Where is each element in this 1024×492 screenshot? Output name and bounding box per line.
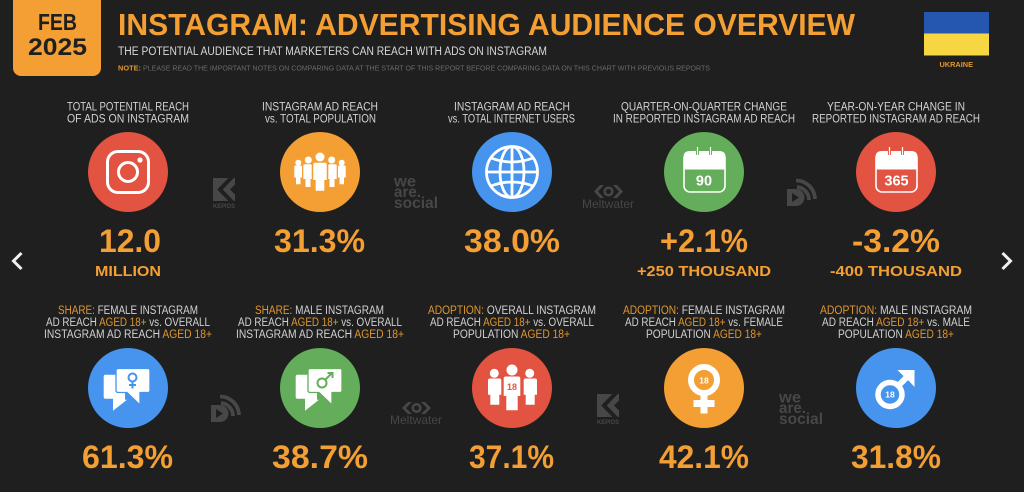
logo: we are social: are. bbox=[779, 400, 806, 417]
panel: quarter-on-quarter change: +250 THOUSAND bbox=[637, 263, 771, 280]
panel: male share: AD REACH AGED 18+ vs. OVERALL bbox=[238, 317, 403, 329]
icon: instagram bbox=[88, 132, 168, 212]
panel: male share: SHARE: MALE INSTAGRAM bbox=[255, 305, 384, 317]
panel: reach vs population bbox=[262, 102, 378, 259]
panel: overall adoption: POPULATION AGED 18+ bbox=[453, 329, 570, 341]
logo: DataReportal bbox=[211, 396, 239, 422]
panel: total potential reach bbox=[67, 102, 189, 280]
icon: male symbol 18: 18 bbox=[885, 390, 895, 400]
logo: Meltwater: Meltwater bbox=[582, 197, 634, 211]
icon: male symbol 18 bbox=[856, 348, 936, 428]
icon: calendar 90 bbox=[664, 132, 744, 212]
logo: we are social: are. bbox=[394, 184, 421, 201]
flag: Ukraine: UKRAINE bbox=[940, 60, 973, 69]
panel: year-on-year change: -3.2% bbox=[852, 223, 940, 259]
panel: total potential reach: TOTAL POTENTIAL REACH bbox=[67, 102, 189, 114]
panel: reach vs internet users bbox=[448, 102, 575, 259]
logo: we are social: we bbox=[778, 390, 801, 406]
panel: male adoption bbox=[820, 305, 972, 475]
panel: year-on-year change: -400 THOUSAND bbox=[830, 263, 962, 280]
logo: Meltwater: Meltwater bbox=[390, 413, 442, 427]
panel: year-on-year change: REPORTED INSTAGRAM AD REACH bbox=[812, 114, 980, 126]
panel: overall adoption: AD REACH AGED 18+ vs. OVERALL bbox=[430, 317, 595, 329]
logo: Kepios: KEPIOS bbox=[213, 203, 236, 210]
logo: Kepios bbox=[597, 392, 620, 426]
panel: female share: AD REACH AGED 18+ vs. OVERALL bbox=[46, 317, 211, 329]
panel: female share: INSTAGRAM AD REACH AGED 18+ bbox=[44, 329, 212, 341]
panel: female adoption: AD REACH AGED 18+ vs. FEMALE bbox=[625, 317, 783, 329]
arrow: previous bbox=[14, 253, 22, 269]
logo: we are social: social bbox=[779, 411, 823, 428]
panel: female adoption: POPULATION AGED 18+ bbox=[646, 329, 762, 341]
icon: globe bbox=[472, 132, 552, 212]
panel: reach vs internet users: 38.0% bbox=[464, 223, 560, 259]
panel: female share bbox=[44, 305, 212, 475]
logo: we are social bbox=[393, 174, 438, 212]
icon: female symbol 18: 18 bbox=[699, 376, 709, 386]
panel: male share: 38.7% bbox=[272, 439, 368, 475]
panel: reach vs population: INSTAGRAM AD REACH bbox=[262, 102, 378, 114]
panel: male adoption: POPULATION AGED 18+ bbox=[838, 329, 954, 341]
arrow: next bbox=[1002, 253, 1010, 269]
panel: overall adoption bbox=[428, 305, 596, 475]
panel: male share bbox=[236, 305, 404, 475]
panel: female adoption: 42.1% bbox=[659, 439, 749, 475]
panel: year-on-year change bbox=[812, 102, 980, 280]
panel: quarter-on-quarter change: +2.1% bbox=[660, 223, 748, 259]
panel: total potential reach: MILLION bbox=[95, 263, 161, 280]
panel: reach vs population: 31.3% bbox=[274, 223, 365, 259]
date badge: FEB bbox=[38, 9, 77, 35]
logo: we are social: social bbox=[394, 195, 438, 212]
panel: total potential reach: 12.0 bbox=[99, 223, 161, 259]
icon: calendar 365 bbox=[856, 132, 936, 212]
logo: Meltwater bbox=[582, 185, 634, 211]
icon: adults 18 plus: 18 bbox=[507, 382, 517, 392]
subtitle: THE POTENTIAL AUDIENCE THAT MARKETERS CAN REACH WITH ADS ON INSTAGRAM bbox=[118, 46, 547, 58]
panel: male adoption: AD REACH AGED 18+ vs. MALE bbox=[822, 317, 970, 329]
panel: total potential reach: OF ADS ON INSTAGRAM bbox=[67, 114, 189, 126]
logo: we are social bbox=[778, 390, 823, 428]
panel: year-on-year change: YEAR-ON-YEAR CHANGE IN bbox=[827, 102, 965, 114]
logo: Meltwater bbox=[390, 402, 442, 427]
logo: Kepios bbox=[213, 176, 236, 210]
panel: female share: 61.3% bbox=[82, 439, 173, 475]
icon: female symbol 18 bbox=[664, 348, 744, 428]
icon: male speech bubbles bbox=[280, 348, 360, 428]
panel: quarter-on-quarter change bbox=[613, 102, 795, 280]
panel: reach vs population: vs. TOTAL POPULATION bbox=[265, 114, 376, 126]
panel: female share: SHARE: FEMALE INSTAGRAM bbox=[58, 305, 198, 317]
panel: quarter-on-quarter change: IN REPORTED INSTAGRAM AD REACH bbox=[613, 114, 795, 126]
date badge: 2025 bbox=[28, 34, 87, 61]
panel: male adoption: 31.8% bbox=[851, 439, 941, 475]
icon: calendar 90: 90 bbox=[696, 174, 712, 190]
panel: male adoption: ADOPTION: MALE INSTAGRAM bbox=[820, 305, 972, 317]
icon: calendar 365: 365 bbox=[884, 174, 909, 190]
flag: Ukraine bbox=[924, 12, 989, 69]
panel: reach vs internet users: vs. TOTAL INTERNET USERS bbox=[448, 114, 575, 126]
logo: Kepios: KEPIOS bbox=[597, 419, 620, 426]
panel: male share: INSTAGRAM AD REACH AGED 18+ bbox=[236, 329, 404, 341]
panel: overall adoption: 37.1% bbox=[469, 439, 554, 475]
icon: female speech bubbles bbox=[88, 348, 168, 428]
panel: overall adoption: ADOPTION: OVERALL INSTAGRAM bbox=[428, 305, 596, 317]
date badge bbox=[13, 0, 101, 76]
icon: group of people bbox=[280, 132, 360, 212]
panel: quarter-on-quarter change: QUARTER-ON-QUARTER CHANGE bbox=[621, 102, 787, 114]
logo: DataReportal bbox=[787, 180, 815, 206]
note: NOTE: bbox=[118, 64, 141, 72]
logo: we are social: we bbox=[393, 174, 416, 190]
icon: adults 18 plus bbox=[472, 348, 552, 428]
title: INSTAGRAM: ADVERTISING AUDIENCE OVERVIEW bbox=[118, 7, 856, 42]
panel: female adoption: ADOPTION: FEMALE INSTAGRAM bbox=[623, 305, 785, 317]
note: PLEASE READ THE IMPORTANT NOTES ON COMPARING DATA AT THE START OF THIS REPORT BEFORE COMPARING DATA ON THIS CHART WITH PREVIOUS REPORTS bbox=[143, 64, 710, 72]
panel: female adoption bbox=[623, 305, 785, 475]
panel: reach vs internet users: INSTAGRAM AD REACH bbox=[454, 102, 570, 114]
